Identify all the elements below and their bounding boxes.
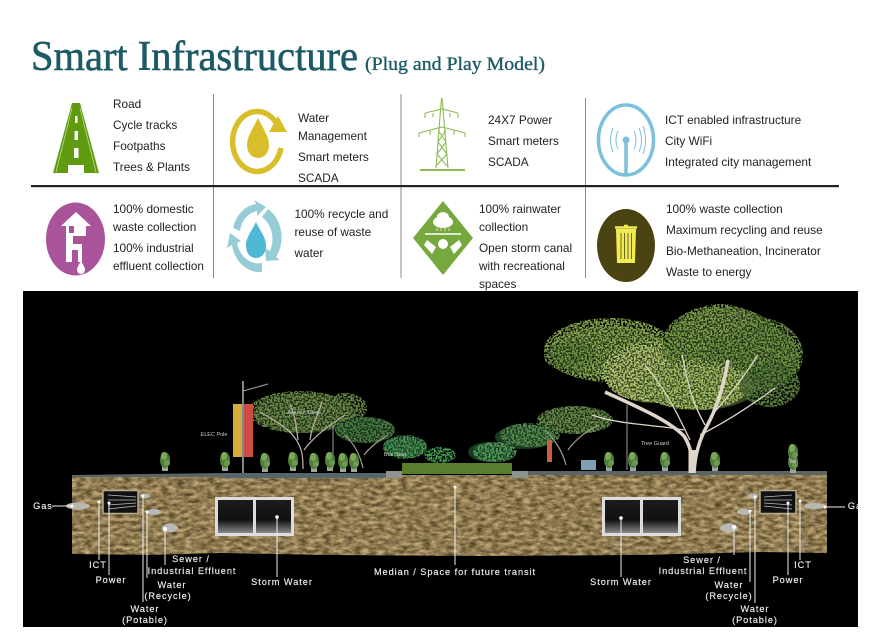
kiosk (581, 460, 596, 470)
text: water: Management (298, 129, 368, 143)
foliage base: dim canopy (255, 307, 799, 462)
text: water (298, 111, 369, 185)
labels left: Industrial Effluent (148, 566, 236, 576)
text: recycle: reuse of waste (294, 225, 372, 239)
text: rainwater: 100% rainwater (479, 202, 561, 216)
labels right: Industrial Effluent (659, 566, 747, 576)
light poles (333, 405, 627, 470)
labels left: Gas (33, 501, 53, 511)
street pole and banners (233, 381, 552, 473)
icon: rainwater (413, 201, 473, 275)
labels right: ICT (794, 560, 812, 570)
text: domestic: effluent collection (113, 259, 204, 273)
text: power: SCADA (488, 155, 529, 169)
leader lines (52, 487, 845, 603)
label: median: Median / Space for future transit (374, 567, 536, 577)
foliage: big tree (544, 304, 803, 410)
text: rainwater: collection (479, 220, 528, 234)
tiny surface labels (201, 410, 669, 458)
text: rainwater: Open storm canal (479, 241, 572, 255)
plants (160, 444, 798, 473)
text: rainwater: spaces (479, 277, 516, 291)
labels left: Storm Water (251, 577, 313, 587)
grid dividers (31, 94, 839, 278)
labels right: Sewer / (683, 555, 721, 565)
utility duct left (103, 490, 138, 514)
tiny surface labels: Bus Stop (384, 452, 406, 458)
icon: domestic waste (46, 202, 105, 276)
icon: ICT (598, 105, 654, 175)
text: road: Cycle tracks (113, 118, 177, 132)
labels left: (Potable) (122, 615, 168, 625)
text: waste: 100% waste collection (666, 202, 783, 216)
text: road: Footpaths (113, 139, 166, 153)
pipes left (66, 494, 178, 532)
text: domestic: 100% domestic (113, 202, 194, 216)
text: rainwater: with recreational (478, 259, 565, 273)
icon: water management (233, 111, 287, 171)
pipes right (720, 494, 826, 532)
text: recycle (294, 207, 388, 260)
text: power (488, 113, 559, 169)
tree trunks (260, 355, 775, 473)
text: rainwater (478, 202, 572, 291)
panel: street cross-section (23, 291, 862, 627)
labels right: Storm Water (590, 577, 652, 587)
labels left: Power (96, 575, 126, 585)
title: (Plug and Play Model) (365, 54, 545, 75)
text: road: Trees & Plants (113, 160, 190, 174)
tiny surface labels: Tree Guard (641, 441, 669, 447)
text: waste: Bio-Methaneation, Incinerator (666, 244, 821, 258)
foliage: avenue trees (248, 391, 613, 463)
labels left: ICT (89, 560, 107, 570)
icon: power tower (419, 98, 465, 170)
text: power: 24X7 Power (488, 113, 552, 127)
road surface (72, 471, 827, 478)
text: power: Smart meters (488, 134, 559, 148)
utility duct right (760, 490, 796, 514)
labels right: Water (741, 604, 769, 614)
labels left: Water (131, 604, 159, 614)
text: domestic (112, 202, 204, 273)
labels right: Power (773, 575, 803, 585)
labels right (590, 501, 862, 625)
title (31, 33, 545, 80)
text: recycle: water (294, 246, 323, 260)
text: road (113, 97, 190, 174)
labels left (33, 501, 313, 625)
storm water box left (215, 497, 294, 536)
labels right: (Potable) (732, 615, 778, 625)
icon: road (53, 103, 99, 173)
soil (72, 475, 827, 556)
tiny surface labels: Avenue Trees (287, 410, 321, 416)
tiny surface labels: ELEC Pole (201, 432, 227, 438)
leader dots (70, 486, 826, 531)
labels right: Ga (848, 501, 862, 511)
title: Smart Infrastructure (31, 33, 358, 80)
text: water: SCADA (298, 171, 339, 185)
right page margin (858, 291, 879, 627)
labels left: (Recycle) (144, 591, 192, 601)
storm water box right (602, 497, 681, 536)
text: water: Smart meters (298, 150, 369, 164)
text: recycle: 100% recycle and (294, 207, 388, 221)
text: domestic: waste collection (112, 220, 196, 234)
icon: waste bin (597, 209, 655, 282)
text: ICT: City WiFi (665, 134, 712, 148)
text: water: Water (298, 111, 329, 125)
text: waste: Maximum recycling and reuse (666, 223, 823, 237)
text: ICT: ICT enabled infrastructure (665, 113, 802, 127)
text: ICT: Integrated city management (665, 155, 812, 169)
text: ICT (665, 113, 812, 169)
text: waste: Waste to energy (666, 265, 752, 279)
labels left: Water (158, 580, 186, 590)
labels right: (Recycle) (705, 591, 753, 601)
text: waste (666, 202, 823, 279)
median hedge (402, 463, 512, 474)
labels left: Sewer / (172, 554, 210, 564)
text: road: Road (113, 97, 141, 111)
icon: water recycle (227, 200, 282, 272)
labels right: Water (715, 580, 743, 590)
text: domestic: 100% industrial (113, 241, 194, 255)
